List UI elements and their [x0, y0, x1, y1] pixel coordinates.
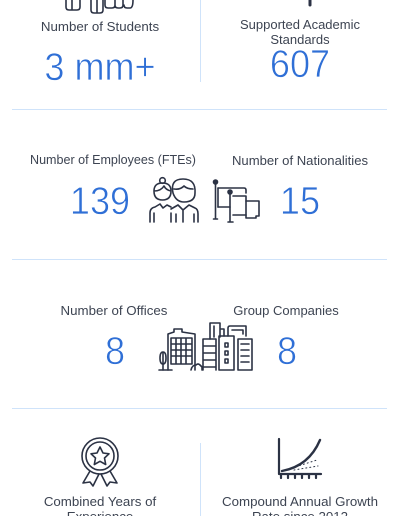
- label: group companies: Group Companies: [233, 303, 339, 318]
- icon: flags: [212, 179, 260, 223]
- value: nationalities: 15: [280, 180, 320, 223]
- icon: office building: [158, 328, 202, 371]
- icon: academic standards: [308, 0, 312, 6]
- icon: award rosette: [81, 437, 119, 487]
- value: group companies: 8: [277, 330, 297, 373]
- label: number of nationalities: Number of Nationalities: [232, 153, 368, 168]
- value: supported academic standards: 607: [270, 43, 330, 86]
- icon: city buildings: [202, 322, 253, 371]
- icon: employees: [149, 176, 199, 223]
- label: combined years of experience: [44, 494, 156, 516]
- value: number of students: 3 mm+: [44, 46, 156, 89]
- label: combined years of experience: Combined Years of: [44, 494, 156, 509]
- label: compound annual growth rate: Compound Annual Growth: [222, 494, 378, 509]
- value: employees: 139: [70, 180, 130, 223]
- label: number of offices: Number of Offices: [61, 303, 167, 318]
- value: offices: 8: [105, 330, 125, 373]
- label: supported academic standards: Standards: [270, 32, 330, 47]
- label: supported academic standards: [240, 17, 360, 47]
- icon: growth chart: [278, 438, 322, 480]
- label: supported academic standards: Supported Academic: [240, 17, 360, 32]
- label: compound annual growth rate: [222, 494, 378, 516]
- label: number of employees: Number of Employees (FTEs): [30, 153, 196, 167]
- label: number of students: Number of Students: [41, 19, 159, 34]
- icon: students: [65, 0, 134, 14]
